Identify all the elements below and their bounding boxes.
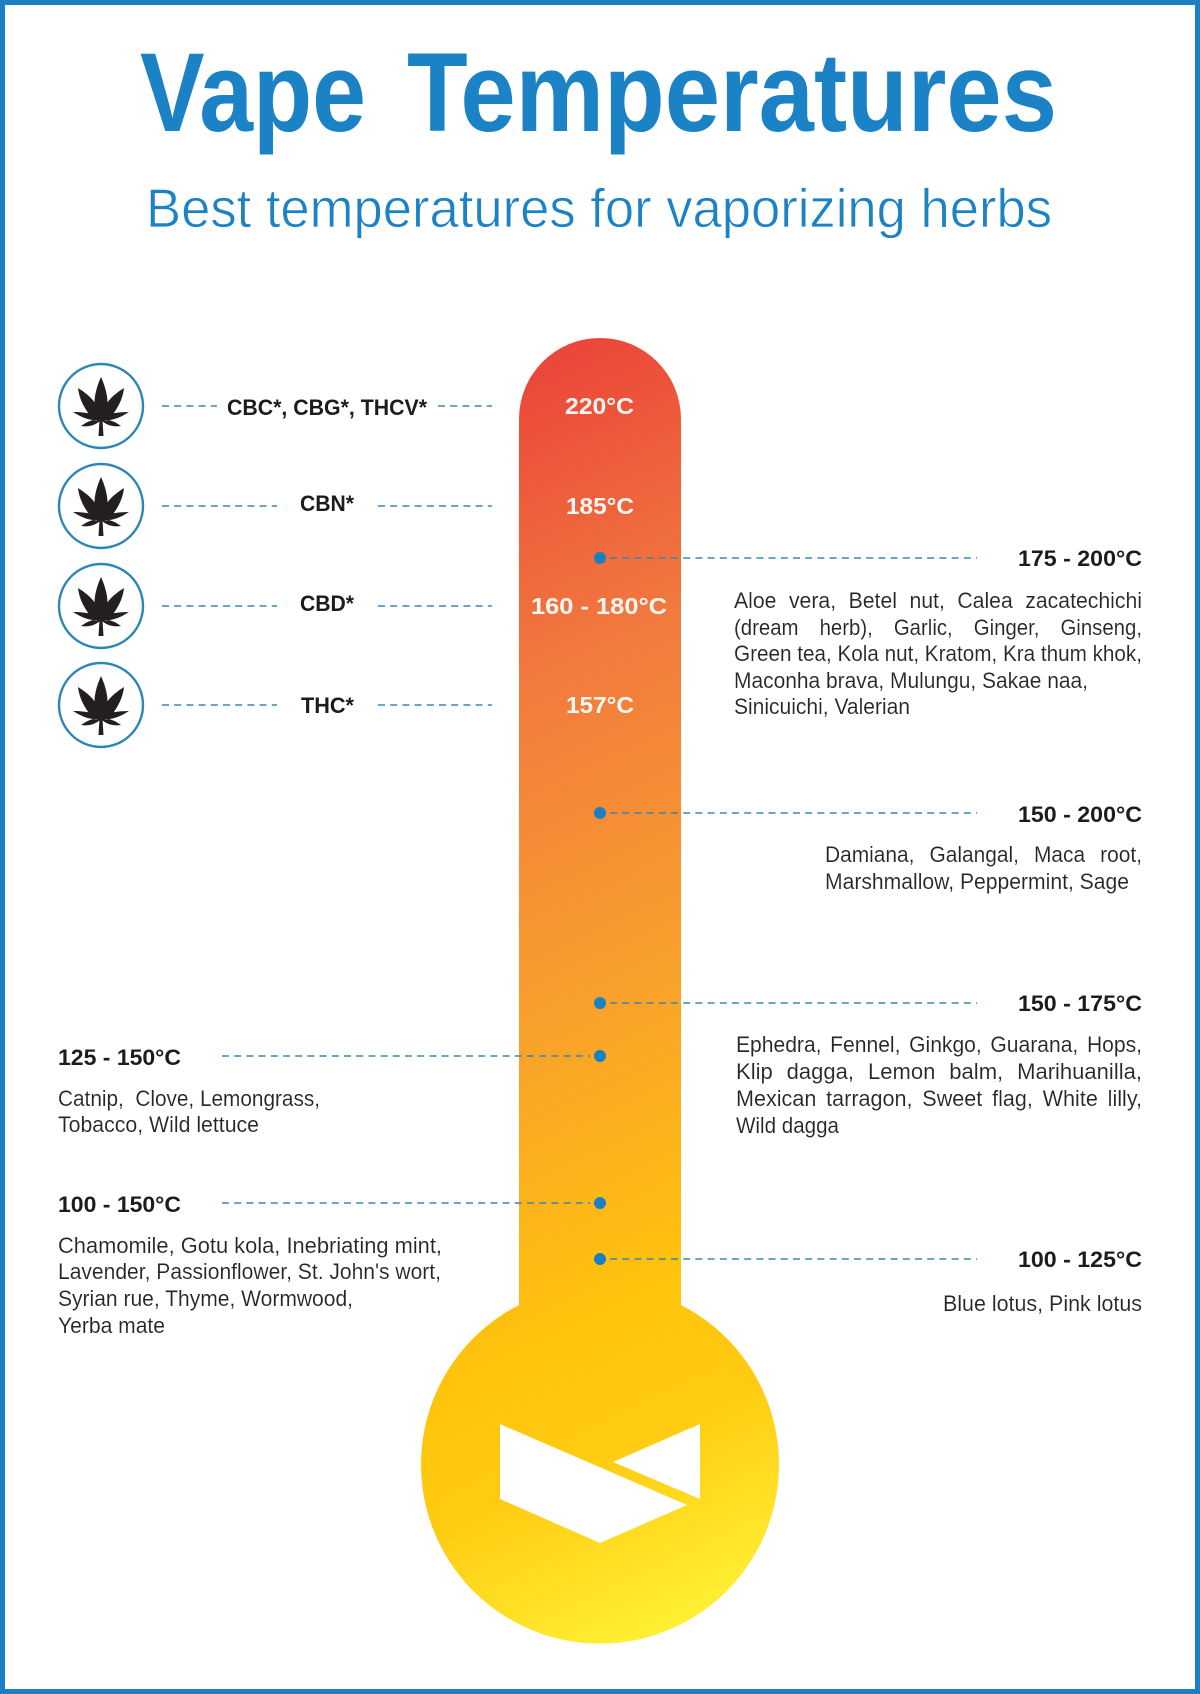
- cannabinoid row: THC: THC*: [301, 693, 354, 718]
- callout: 100 - 125°C: [594, 1247, 1142, 1316]
- callout: 150 - 200°C: Damiana, Galangal, Maca root,: [825, 842, 1142, 867]
- logo mark on bulb: [500, 1424, 700, 1543]
- callout: 100 - 150°C: 100 - 150°C: [58, 1192, 181, 1217]
- subtitle: Best temperatures for vaporizing herbs: [146, 178, 1052, 239]
- title: [140, 30, 1057, 155]
- callout: 175 - 200°C: (dream herb), Garlic, Ginger, Ginseng,: [734, 615, 1142, 640]
- callout: 175 - 200°C: Sinicuichi, Valerian: [734, 694, 910, 719]
- callout: 125 - 150°C: 125 - 150°C: [58, 1045, 181, 1070]
- callout: 175 - 200°C: Maconha brava, Mulungu, Sakae naa,: [734, 668, 1088, 693]
- temperature label: 220°C: 220°C: [565, 393, 634, 419]
- cannabinoid row: CBN: CBN*: [300, 491, 354, 516]
- callout: 150 - 175°C: 150 - 175°C: [1018, 991, 1142, 1016]
- cannabinoid row: CBN: [59, 464, 492, 548]
- callout: 100 - 125°C: 100 - 125°C: [1018, 1247, 1142, 1272]
- callout: 175 - 200°C: [594, 546, 1142, 719]
- callout: 100 - 150°C: Lavender, Passionflower, St. John's wort,: [58, 1259, 441, 1284]
- temperature label: 157°C: 157°C: [566, 692, 634, 718]
- title: Vape: [140, 30, 366, 155]
- callout: 100 - 150°C: [58, 1192, 606, 1338]
- callout: 125 - 150°C: Tobacco, Wild lettuce: [58, 1112, 259, 1137]
- title: Temperatures: [407, 30, 1057, 155]
- callout: 125 - 150°C: [58, 1045, 606, 1137]
- temperature label: 185°C: 185°C: [566, 493, 634, 519]
- callout: 150 - 175°C: Wild dagga: [736, 1113, 839, 1138]
- cannabinoid row: CBC, CBG, THCV: [59, 364, 492, 448]
- thermometer: [421, 338, 779, 1644]
- callout: 150 - 175°C: Ephedra, Fennel, Ginkgo, Guarana, Hops,: [736, 1032, 1142, 1057]
- callout: 150 - 200°C: 150 - 200°C: [1018, 802, 1142, 827]
- callout: 100 - 150°C: Chamomile, Gotu kola, Inebriating mint,: [58, 1233, 442, 1258]
- callout: 100 - 125°C: Blue lotus, Pink lotus: [943, 1291, 1142, 1316]
- temperature label: 160 - 180°C: 160 - 180°C: [531, 593, 667, 619]
- callout: 150 - 175°C: Mexican tarragon, Sweet flag, White lilly,: [736, 1086, 1142, 1111]
- cannabinoid row: CBD: CBD*: [300, 591, 354, 616]
- callout: 100 - 150°C: Yerba mate: [58, 1313, 165, 1338]
- callout: 125 - 150°C: Catnip, Clove, Lemongrass,: [58, 1086, 320, 1111]
- cannabinoid row: CBD: [59, 564, 492, 648]
- callout: 150 - 175°C: Klip dagga, Lemon balm, Marihuanilla,: [736, 1059, 1142, 1084]
- callout: 150 - 200°C: Marshmallow, Peppermint, Sage: [825, 869, 1129, 894]
- cannabinoid row: CBC, CBG, THCV: CBC*, CBG*, THCV*: [227, 395, 427, 420]
- callout: 175 - 200°C: Green tea, Kola nut, Kratom, Kra thum khok,: [734, 641, 1142, 666]
- cannabinoid row: THC: [59, 663, 492, 747]
- callout: 150 - 200°C: [594, 802, 1142, 894]
- callout: 175 - 200°C: Aloe vera, Betel nut, Calea zacatechichi: [734, 588, 1142, 613]
- callout: 150 - 175°C: [594, 991, 1142, 1138]
- callout: 175 - 200°C: 175 - 200°C: [1018, 546, 1142, 571]
- callout: 100 - 150°C: Syrian rue, Thyme, Wormwood,: [58, 1286, 353, 1311]
